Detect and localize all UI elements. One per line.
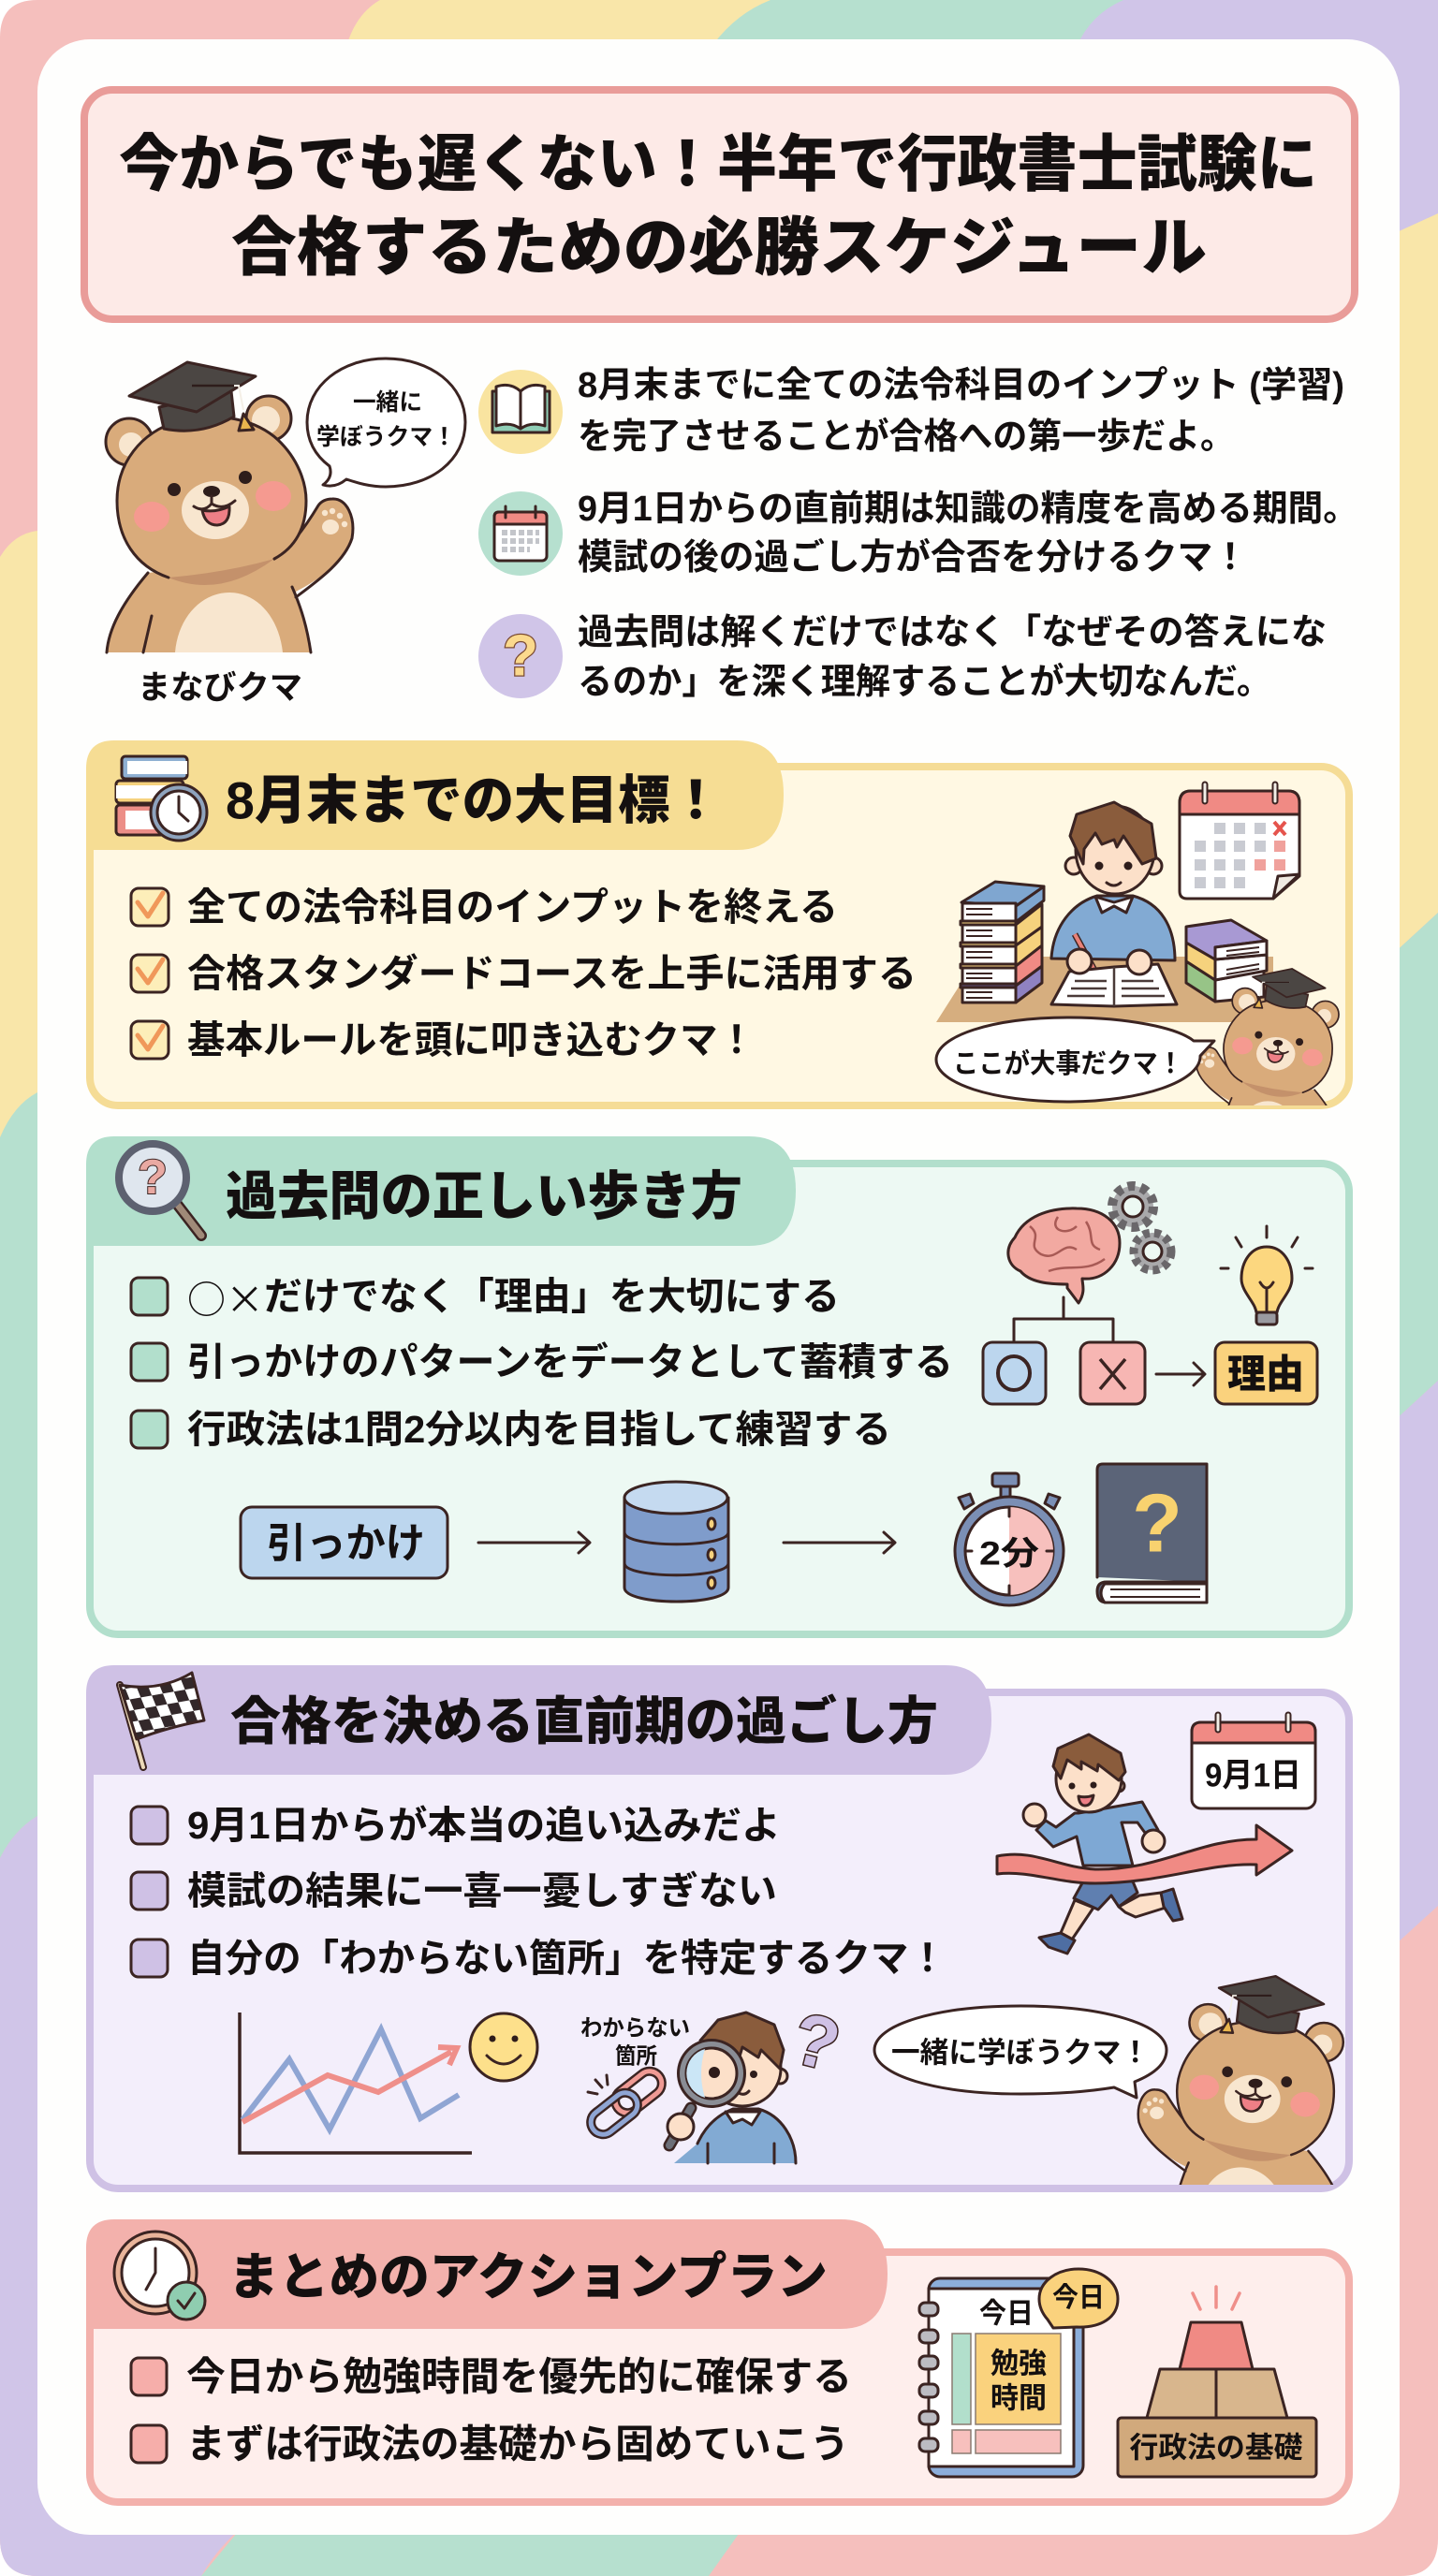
icon: calendar [478,491,563,576]
icon: magnifier with question: ? [138,1150,168,1205]
intro text 1: を完了させることが合格への第一歩だよ。 [578,417,1235,457]
intro text 3: るのか」を深く理解することが大切なんだ。 [578,663,1271,702]
intro text 2: 模試の後の過ごし方が合否を分けるクマ！ [578,538,1248,578]
box: circle [983,1342,1046,1404]
box: cross [1080,1342,1145,1404]
label: unknown part: わからない [580,2016,690,2041]
icon: question mark [478,614,563,698]
icon: books and clock [116,756,207,841]
panel frame [90,2252,1349,2502]
illustration: right book stack [1186,920,1267,1002]
heading tab [86,740,784,850]
box: trick [241,1507,448,1578]
checklist [131,2355,852,2466]
illustration: running boy [1023,1734,1182,1954]
panel: past exam method [86,1136,1349,1634]
mascot: manabi bear [106,362,353,652]
icon: question book: ? [1132,1477,1182,1569]
speech bubble: study together: 一緒に学ぼうクマ！ [891,2037,1150,2069]
checklist: ○×だけでなく「理由」を大切にする [187,1268,840,1325]
label: unknown part [580,2016,690,2069]
icon: brain [1008,1208,1120,1303]
checklist: 合格スタンダードコースを上手に活用する [187,952,917,995]
illustration: left book stack [961,882,1044,1003]
speech bubble: study together [874,2006,1167,2098]
icon: broken chain [586,2067,667,2139]
icon: light bulb [1221,1226,1313,1325]
icon: magnifier with question [119,1144,201,1236]
title banner: 今からでも遅くない！半年で行政書士試験に [119,129,1317,198]
chart: score trend [240,2012,472,2153]
heading text: 8月末までの大目標！ [226,771,722,829]
icon: database [624,1482,728,1602]
speech bubble: together: 一緒に [353,389,422,416]
illustration: studying boy [1051,802,1175,975]
illustration: open book on desk [1051,949,1177,1006]
checklist [131,1268,953,1451]
illustration: study planner: 今日 [1052,2282,1105,2313]
speech bubble: important: ここが大事だクマ！ [953,1047,1183,1079]
intro text 2 [578,490,1358,578]
ribbon arrow [997,1825,1292,1883]
illustration: study planner: 時間 [990,2381,1047,2415]
arrow [784,1532,895,1553]
speech bubble: together: 学ぼうクマ！ [316,424,456,450]
checklist: 模試の結果に一喜一憂しすぎない [187,1869,777,1912]
heading tab [86,1136,796,1246]
illustration: study planner [919,2269,1118,2477]
checklist: 今日から勉強時間を優先的に確保する [186,2355,852,2398]
speech bubble: important [936,1017,1214,1102]
checklist: 自分の「わからない箇所」を特定するクマ！ [187,1937,946,1980]
large bear mascot [1137,1975,1344,2185]
panel frame [90,1692,1349,2188]
checklist [131,1804,946,1980]
illustration: desk [936,957,1273,1022]
panel frame [90,1164,1349,1634]
icon: question mark: ? [503,623,538,689]
diagram: tree branching to circle and cross [1014,1297,1113,1342]
title banner: 合格するための必勝スケジュール [231,212,1207,284]
checklist: 9月1日からが本当の追い込みだよ [187,1804,781,1847]
heading tab [86,2219,888,2329]
intro text 3 [578,613,1327,702]
title banner [84,90,1355,319]
icon: stopwatch: 2分 [979,1535,1039,1573]
box: trick: 引っかけ [267,1520,425,1567]
illustration: boy with magnifier [668,2012,796,2163]
checklist: 行政法は1問2分以内を目指して練習する [187,1408,891,1451]
intro text 3: 過去問は解くだけではなく「なぜその答えにな [578,613,1327,652]
heading tab [86,1665,991,1775]
speech bubble: together [307,359,465,487]
illustration: calendar September 1 [1192,1715,1315,1808]
icon: smiley [470,2013,537,2081]
arrow [1156,1363,1205,1385]
heading text: 合格を決める直前期の過ごし方 [230,1692,938,1750]
icon: question book [1097,1464,1207,1603]
box: reason: 理由 [1227,1352,1304,1397]
panel frame [90,767,1349,1105]
illustration: foundation pyramid [1118,2287,1316,2477]
checklist [131,886,917,1061]
icon: stopwatch [955,1473,1064,1605]
label: unknown part: 箇所 [615,2044,657,2069]
mascot name: まなびクマ [138,670,302,706]
panel: final stretch [86,1665,1349,2217]
icon: question mark: ? [785,1997,848,2086]
checklist: 全ての法令科目のインプットを終える [187,886,838,929]
heading text: 過去問の正しい歩き方 [226,1166,742,1226]
icon: gears [1112,1186,1171,1270]
checklist: まずは行政法の基礎から固めていこう [186,2422,849,2466]
illustration: study planner: 勉強 [990,2348,1047,2379]
illustration: calendar September 1: 9月1日 [1205,1758,1301,1793]
icon: checkered flag [120,1673,204,1767]
panel: action plan [86,2219,1349,2502]
icon: open book [478,370,563,454]
small bear mascot [1196,968,1340,1105]
intro text 2: 9月1日からの直前期は知識の精度を高める期間。 [578,490,1358,529]
checklist: 基本ルールを頭に叩き込むクマ！ [187,1018,756,1061]
illustration: foundation pyramid: 行政法の基礎 [1129,2432,1303,2464]
heading text: まとめのアクションプラン [228,2249,828,2305]
icon: clock with check [114,2232,205,2320]
illustration: study planner: 今日 [979,2299,1034,2329]
illustration: calendar [1180,784,1299,899]
box: reason [1215,1342,1317,1404]
arrow [478,1532,590,1553]
intro text 1 [578,366,1344,457]
panel: August goal [86,740,1349,1135]
checklist: 引っかけのパターンをデータとして蓄積する [187,1340,953,1383]
intro text 1: 8月末までに全ての法令科目のインプット (学習) [578,366,1344,405]
